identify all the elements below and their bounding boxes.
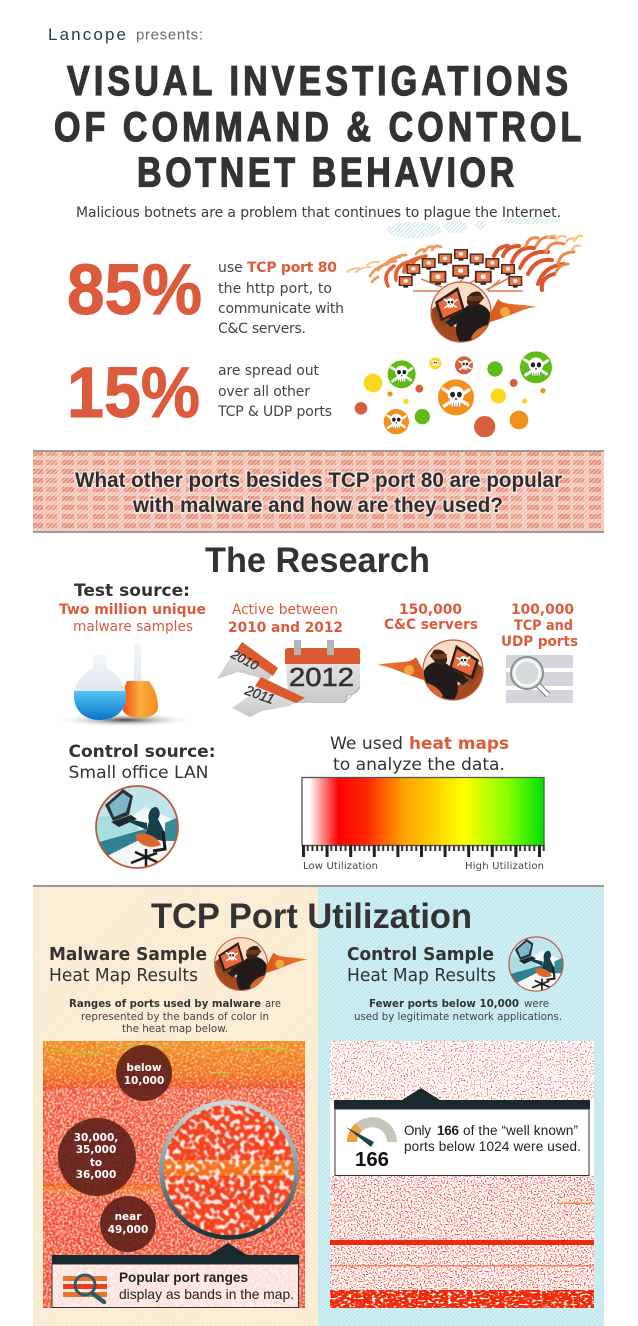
callout circle: 30,000 to 36,000: 36,000 [76,1169,116,1181]
100,000 TCP and UDP ports text: TCP and [514,618,573,634]
callout: well known ports: 166 [437,1123,459,1138]
callout circle: below 10,000 [116,1045,172,1101]
heading: control sample: Heat Map Results [347,965,496,986]
logo: Lancope presents: presents: [136,26,203,44]
heading: TCP Port Utilization: TCP Port Utilization [151,897,472,936]
heat map intro text: to analyze the data. [333,755,505,775]
100,000 TCP and UDP ports text: UDP ports [501,634,578,650]
150,000 C&C servers text [384,602,478,633]
icon: bands with magnifier [63,1275,107,1302]
icon: calendars: 2010 [228,646,262,674]
heading: malware sample [49,944,207,986]
callout: well known ports [334,1088,590,1176]
heading: malware sample: Heat Map Results [49,965,198,986]
stat: 15 percent: are spread out [218,363,320,379]
control description: were [524,998,549,1010]
chart: control heat map [330,1041,594,1308]
banner: question [33,450,604,533]
panel: control sample [318,886,604,1326]
active between text: Active between [232,602,338,618]
banner: question: What other ports besides TCP port 80 are popular [75,468,563,492]
heading: malware sample: Malware Sample [49,944,207,965]
active between text: 2010 and 2012 [228,620,343,636]
active between text [228,602,343,636]
callout circle: 30,000 to 36,000: to [90,1157,102,1169]
title: OF COMMAND & CONTROL [54,105,581,151]
malware description: are [265,998,281,1010]
malware description [69,998,281,1035]
icon: calendars: 2011 [242,681,277,707]
chart: malware heat map [43,1041,305,1308]
heading: control sample [347,944,496,986]
callout circle: near 49,000: 49,000 [108,1224,148,1236]
callout: popular port ranges: Popular port ranges [119,1269,248,1285]
icon: gauge 166: 166 [355,1149,389,1171]
stat: 85 percent: TCP port 80 [247,260,337,276]
illustration: scattered port dots [355,351,552,437]
stat: 85 percent: use [218,260,243,276]
callout circle: near 49,000: near [115,1211,142,1223]
control source text: Small office LAN [68,763,209,783]
stat: 85 percent: C&C servers. [218,321,306,337]
test source text: Test source: [74,581,190,601]
control source text [68,742,216,783]
callout circle: below 10,000: 10,000 [124,1075,164,1087]
icon: office worker [509,937,563,991]
control description: used by legitimate network applications. [354,1011,562,1023]
callout circle: below 10,000: below [126,1062,162,1074]
150,000 C&C servers text: 150,000 [399,602,462,618]
malware description: Ranges of ports used by malware [69,998,261,1010]
test source text: malware samples [73,619,193,635]
logo: Lancope presents [48,25,203,44]
control description [354,998,562,1023]
callout circle: 30,000 to 36,000: 35,000 [76,1144,116,1156]
callout circle: 30,000 to 36,000 [58,1118,136,1196]
callout: popular port ranges: display as bands in the map. [119,1286,294,1302]
title [54,59,581,196]
callout circle: near 49,000 [100,1196,156,1252]
stat: 15 percent: over all other [218,384,310,400]
callout: well known ports: of the “well known” [463,1123,578,1138]
heat map intro text [330,734,509,775]
callout: well known ports: ports below 1024 were used. [404,1139,581,1154]
icon: calendars: 2012 [289,662,354,692]
chart: heat scale legend: Low Utilization [303,861,378,872]
stat: 85 percent: communicate with [218,301,344,317]
100,000 TCP and UDP ports text [501,602,578,650]
subtitle: Malicious botnets are a problem that continues to plague the Internet. [76,205,561,221]
callout circle: 30,000 to 36,000: 30,000, [74,1132,118,1144]
heat map intro text: heat maps [409,734,509,754]
heading: control sample: Control Sample [347,944,494,965]
icon: office worker [96,786,178,868]
test source text [59,581,206,635]
heading: The Research: The Research [205,541,430,580]
callout: popular port ranges [52,1243,299,1308]
panel: malware sample [33,886,318,1326]
stat: 15 percent [67,354,332,433]
icon: calendars [217,640,360,717]
callout: well known ports: Only [404,1123,431,1138]
malware description: represented by the bands of color in [81,1011,269,1023]
150,000 C&C servers text: C&C servers [384,617,478,633]
chart: heat scale legend [302,778,545,872]
icon: flasks [55,643,195,727]
test source text: Two million unique [59,602,206,618]
icon: hacker with flag [377,640,485,704]
illustration: botnet network [347,218,582,346]
stat: 15 percent: TCP & UDP ports [217,404,332,420]
title: VISUAL INVESTIGATIONS [67,59,568,105]
icon: hacker [213,938,308,994]
title: BOTNET BEHAVIOR [137,150,514,196]
icon: gauge 166 [346,1122,392,1171]
chart: heat scale legend: High Utilization [465,861,544,872]
stat: 85 percent [67,251,344,337]
control description: Fewer ports below 10,000 [369,998,519,1010]
divider line above TCP section [33,885,604,887]
stat: 85 percent: 85% [67,251,202,330]
control source text: Control source: [68,742,216,762]
stat: 85 percent: the http port, to [218,281,332,297]
100,000 TCP and UDP ports text: 100,000 [511,602,574,618]
banner: question: with malware and how are they used? [132,493,503,517]
malware description: the heat map below. [122,1023,228,1035]
icon: magnified list [506,655,573,703]
stat: 15 percent: 15% [67,354,200,433]
logo: Lancope presents: Lancope [48,25,126,44]
heat map intro text: We used [330,734,403,754]
magnifier [160,1101,298,1239]
